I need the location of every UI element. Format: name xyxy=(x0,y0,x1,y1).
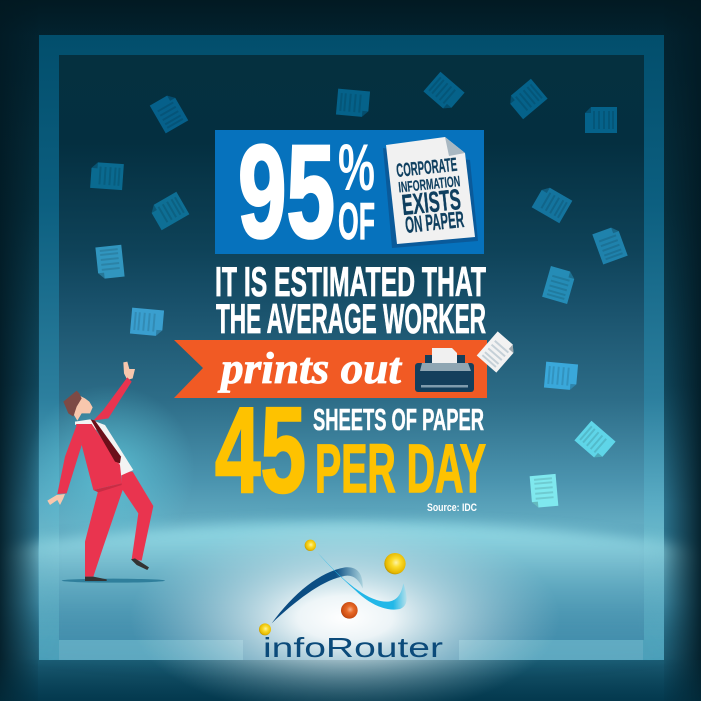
glow behind figure xyxy=(25,385,195,555)
logo wordmark: infoRouter xyxy=(263,632,443,663)
bottom edge shade xyxy=(0,660,701,701)
paper note: ON PAPER xyxy=(404,206,465,238)
inner panel xyxy=(59,55,644,660)
logo ball bottom xyxy=(259,623,271,635)
headline line 1: IT IS ESTIMATED THAT xyxy=(215,258,486,305)
paper 12 xyxy=(574,421,616,461)
per day: PER DAY xyxy=(315,430,486,507)
paper 2 xyxy=(90,162,124,190)
icon: printer xyxy=(415,348,474,392)
frame gap tint left xyxy=(59,640,243,660)
logo ball large xyxy=(384,553,406,574)
paper note: INFORMATION xyxy=(398,173,461,196)
icon: white paper xyxy=(477,331,517,373)
falling papers xyxy=(90,72,628,508)
paper 10 xyxy=(542,266,576,304)
percent sign: % xyxy=(338,130,375,204)
logo light swoosh xyxy=(317,552,407,610)
paper 4 xyxy=(336,89,370,117)
frame xyxy=(39,35,664,660)
paper note: CORPORATE xyxy=(395,155,458,182)
paper 9 xyxy=(592,226,628,264)
blue stat panel xyxy=(215,118,484,265)
orange ribbon xyxy=(174,340,487,398)
centre glow xyxy=(130,518,560,701)
paper 6 xyxy=(506,79,548,119)
stat 45: 45 xyxy=(215,382,306,518)
right edge shade xyxy=(664,0,701,701)
source: Source: IDC xyxy=(427,502,477,514)
paper 1 xyxy=(150,93,188,133)
paper 7 xyxy=(585,107,617,133)
stat 95: 95 xyxy=(238,118,335,265)
logo dark swoosh xyxy=(272,567,363,623)
paper 13 xyxy=(530,474,558,508)
logo ball top xyxy=(305,540,316,551)
prints out script: prints out xyxy=(217,344,403,393)
paper note xyxy=(383,137,478,248)
paper 5 xyxy=(423,72,465,112)
paper 11 xyxy=(544,362,578,390)
sheets of paper: SHEETS OF PAPER xyxy=(313,402,484,437)
light band xyxy=(10,516,692,618)
logo ball orange xyxy=(341,602,358,619)
paper note: EXISTS xyxy=(400,184,462,222)
paper 3 xyxy=(149,192,189,230)
businessman in red suit xyxy=(47,362,165,583)
paper 15 xyxy=(130,308,164,336)
frame gap tint right xyxy=(459,640,643,660)
OF: OF xyxy=(338,193,375,251)
infoRouter logo xyxy=(259,540,407,635)
left edge shade xyxy=(0,0,38,701)
paper 14 xyxy=(95,245,125,279)
top edge shade xyxy=(0,0,701,35)
paper 8 xyxy=(532,185,572,223)
